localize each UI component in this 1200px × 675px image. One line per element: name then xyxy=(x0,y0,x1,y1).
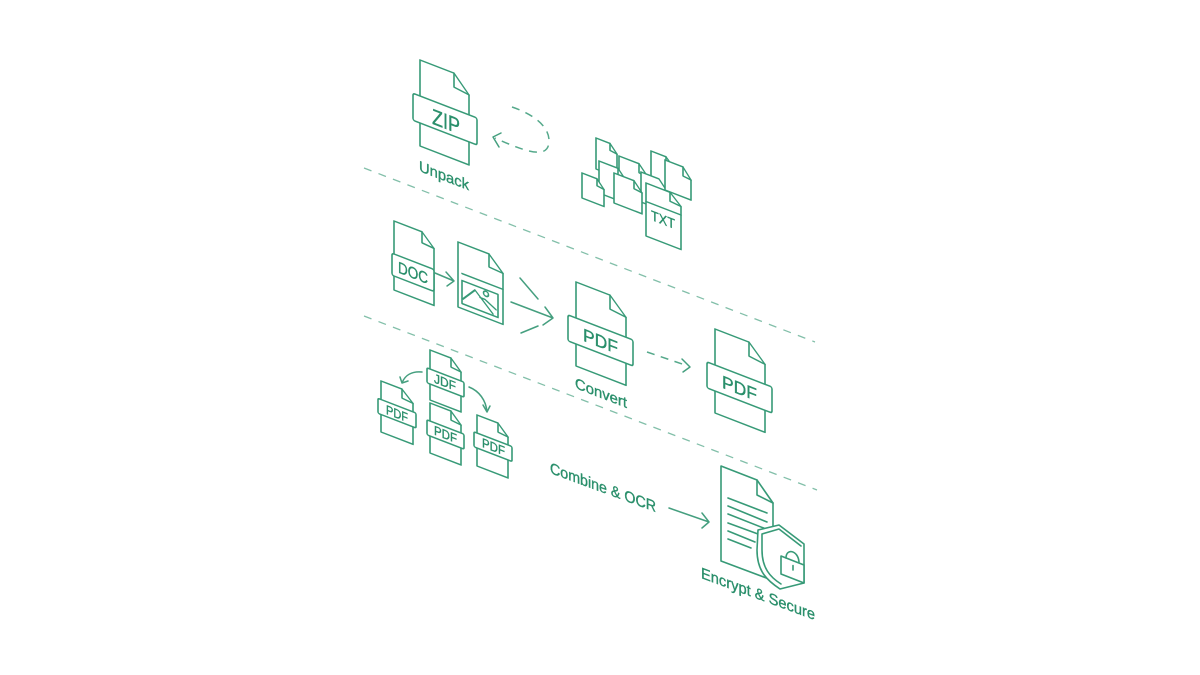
icon: PDF file, converted xyxy=(568,279,633,388)
label: Combine & OCR: Combine & OCR xyxy=(550,459,656,516)
icon: PDF file, middle: PDF xyxy=(434,423,457,446)
label: Convert: Convert xyxy=(575,375,628,412)
small file E xyxy=(614,173,642,214)
padlock xyxy=(781,556,804,583)
icon: PDF file, left: PDF xyxy=(386,402,408,425)
document fold xyxy=(757,480,773,503)
icon: PDF file, output xyxy=(707,326,772,435)
document xyxy=(721,466,777,582)
TXT file: TXT xyxy=(651,208,675,233)
icon: PDF file, converted: PDF xyxy=(583,324,618,358)
keyhole xyxy=(792,566,794,570)
padlock shackle xyxy=(786,552,799,562)
shield inner edge xyxy=(762,529,801,584)
arrow: JDF to right PDF xyxy=(469,387,490,412)
small file C xyxy=(619,156,648,203)
icon: image file xyxy=(458,242,503,324)
arrow: JDF to left PDF xyxy=(400,372,422,383)
icon: JDF file: JDF xyxy=(434,371,456,394)
arrow: to secured document xyxy=(669,508,709,528)
small file H xyxy=(641,172,666,212)
small file D xyxy=(582,173,604,206)
arrow: DOC to image xyxy=(435,272,454,286)
small file G xyxy=(665,160,691,200)
label: Encrypt & Secure: Encrypt & Secure xyxy=(701,564,815,624)
arrow: merging into PDF xyxy=(511,278,553,333)
document text lines xyxy=(728,498,767,548)
shield xyxy=(757,525,804,589)
divider: lower dashed line xyxy=(364,316,817,490)
icon: cluster of small files xyxy=(582,138,691,250)
icon: DOC file: DOC xyxy=(398,258,428,288)
divider: upper dashed line xyxy=(364,168,815,342)
arrow: dashed curve from text files to ZIP xyxy=(493,107,549,152)
label: Unpack: Unpack xyxy=(419,158,469,194)
icon: DOC file xyxy=(392,220,434,305)
small file A xyxy=(596,138,617,177)
icon: PDF file, output: PDF xyxy=(722,371,757,405)
icon: PDF file, right: PDF xyxy=(482,435,505,459)
icon: JDF file xyxy=(427,349,464,413)
arrow: dashed to output PDF xyxy=(647,352,690,372)
small file B xyxy=(599,161,626,203)
icon: PDF file, left xyxy=(378,380,416,446)
icon: PDF file, middle xyxy=(427,402,464,466)
icon: ZIP file xyxy=(413,57,477,168)
icon: ZIP file: ZIP xyxy=(432,103,460,139)
icon: secured document with shield xyxy=(721,466,804,589)
small file F xyxy=(651,151,674,193)
icon: PDF file, right xyxy=(474,414,512,480)
